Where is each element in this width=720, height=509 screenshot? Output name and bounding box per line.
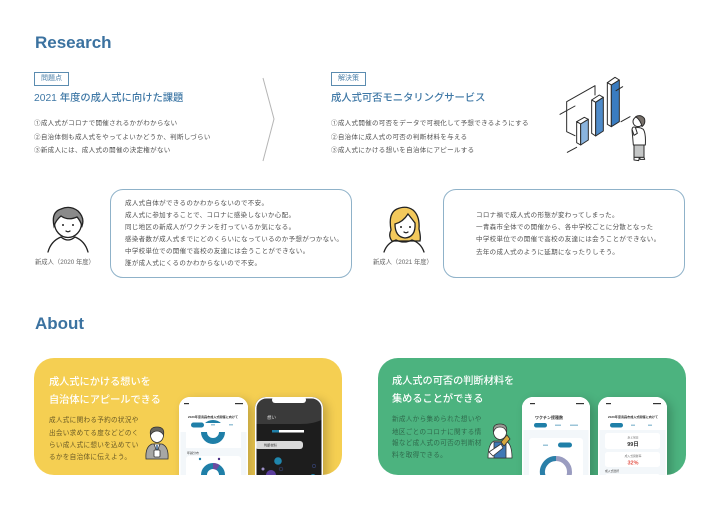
phone: yellow card app screen: 年齢分布 [187, 450, 199, 455]
text block: solution list [331, 119, 529, 154]
illustration: person looking at bar chart [560, 76, 646, 162]
text block: 2020 voices: 同じ地区の新成人がワクチンを打っているか気になる。 [125, 224, 295, 231]
text block: green card body: 新成人から集められた想いや [392, 416, 482, 423]
title: solution heading: 成人式可否モニタリングサービス [331, 93, 485, 104]
title: problem heading: 2021 年度の成人式に向けた課題 [34, 93, 183, 104]
icon: man in suit with phone [146, 426, 168, 460]
phone: yellow card dark screen: 判断材料 [264, 442, 278, 448]
heading: Research: Research [35, 33, 112, 52]
tag: problem: 問題点 [41, 75, 62, 82]
caption: new adult 2021: 新成人（2021 年度） [373, 259, 433, 266]
title: green card heading: 成人式の可否の判断材料を [392, 376, 514, 387]
text block: yellow card body [49, 416, 139, 461]
text block: 2020 voices [125, 200, 343, 267]
heading: About: About [35, 314, 84, 333]
caption: new adult 2020: 新成人（2020 年度） [35, 259, 95, 266]
phone: green card result screen: 成人式開催率 [625, 454, 642, 458]
text block: problem list: ②自治体側も成人式をやってよいかどうか、判断しづらい [34, 134, 211, 141]
phone: green card vaccine screen [522, 397, 590, 487]
phone: green card result screen: 32% [627, 460, 639, 466]
text block: 2021 voices: 一青森市全体での開催から、各中学校ごとに分散となった [476, 224, 653, 231]
text block: green card body: 報など成人式の可否の判断材 [392, 440, 482, 447]
text block: 2021 voices: コロナ禍で成人式の形態が変わってしまった。 [476, 212, 619, 219]
phone: yellow card app screen: 2020年度青森市成人式開催に向けて [188, 414, 238, 419]
phone: yellow card dark screen [255, 397, 323, 487]
tag: problem [34, 72, 69, 86]
title: yellow card heading: 成人式にかける想いを [49, 377, 151, 388]
text block: 2020 voices: 誰が成人式にくるのかわからないので不安。 [125, 260, 261, 267]
text block: yellow card body: らい成人式に想いを込めてい [49, 442, 139, 449]
panel: yellow feature card [34, 358, 342, 475]
title: yellow card heading: 自治体にアピールできる [49, 395, 161, 406]
text block: solution list: ①成人式開催の可否をデータで可視化して予想できるようにする [331, 120, 529, 127]
tag: solution: 解決策 [338, 75, 359, 82]
text block: yellow card body: 出会い求めてる度などどのく [49, 430, 139, 437]
phone: green card result screen: 成人式選択 [605, 469, 619, 473]
text block: 2021 voices: 中学校単位での開催で高校の友達には会うことができない。 [476, 236, 660, 243]
text block: 2020 voices: 感染者数が成人式までにどのくらいになっているのか予想がつかない。 [125, 236, 343, 243]
panel: 2020 voices [110, 189, 352, 278]
text block: yellow card body: 成人式に関わる予約の状況や [49, 417, 139, 424]
icon: man holding object [488, 424, 512, 458]
phone: green card result screen: 99日 [627, 441, 639, 448]
phone: green card result screen: あと何日 [627, 436, 639, 440]
panel: 2021 voices [443, 189, 685, 278]
text block: 2021 voices [476, 212, 660, 256]
phone: yellow card app screen [179, 397, 248, 487]
text block: 2020 voices: 成人式に参加することで、コロナに感染しないか心配。 [125, 212, 295, 219]
text block: green card body [392, 415, 482, 459]
icon: new adult 2021 girl [383, 206, 425, 253]
text block: problem list: ①成人式がコロナで開催されるかがわからない [34, 120, 177, 127]
arrow: chevron [262, 78, 274, 162]
tag: solution [331, 72, 366, 86]
text block: solution list: ③成人式にかける想いを自治体にアピールする [331, 147, 474, 154]
icon: new adult 2020 boy [47, 206, 89, 253]
text block: 2020 voices: 成人式自体ができるのかわからないので不安。 [125, 200, 268, 207]
phone: green card vaccine screen: ワクチン接種数 [535, 414, 563, 420]
text block: problem list: ③新成人には、成人式の開催の決定権がない [34, 147, 171, 154]
phone: yellow card dark screen: 想い [267, 414, 276, 420]
text block: solution list: ②自治体に成人式の可否の判断材料を与える [331, 134, 467, 141]
text block: yellow card body: るかを自治体に伝えよう。 [49, 454, 131, 461]
phone: green card result screen: 2020年度青森市成人式開催に向けて [608, 414, 658, 419]
title: green card heading [392, 375, 514, 405]
title: yellow card heading [49, 376, 161, 406]
text block: 2021 voices: 去年の成人式のように延期になったりしそう。 [476, 249, 619, 256]
text block: 2020 voices: 中学校単位での開催で高校の友達には会うことができない。 [125, 248, 309, 255]
title: green card heading: 集めることができる [392, 394, 483, 405]
panel: green feature card [378, 358, 686, 475]
text block: green card body: 地区ごとのコロナに関する情 [392, 429, 482, 436]
text block: problem list [34, 120, 211, 154]
phone: green card result screen [598, 397, 667, 487]
text block: green card body: 料を取得できる。 [392, 452, 447, 459]
